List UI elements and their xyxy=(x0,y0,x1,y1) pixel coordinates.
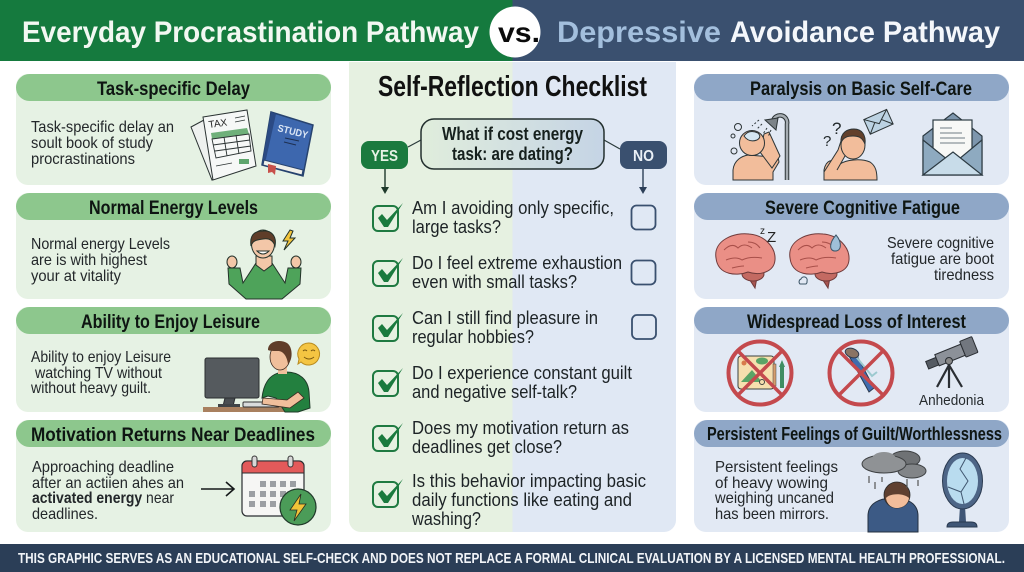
panel: severe cognitive fatigue: Severe cognitive xyxy=(887,235,994,252)
panel: persistent feelings of guilt/worthlessness: weighing uncaned xyxy=(714,490,834,507)
icon: study book xyxy=(262,112,313,176)
title: everyday procrastination pathway: Everyday Procrastination Pathway xyxy=(22,16,479,49)
checklist item 5: deadlines get close? xyxy=(412,436,562,457)
checklist item 2: Do I feel extreme exhaustion xyxy=(412,252,622,273)
panel: severe cognitive fatigue: Severe Cognitive Fatigue xyxy=(765,197,960,219)
panel: normal energy levels xyxy=(16,193,331,299)
panel: self-reflection checklist xyxy=(349,62,676,532)
panel: ability to enjoy leisure: without heavy guilt. xyxy=(30,380,151,397)
panel: ability to enjoy leisure xyxy=(16,307,331,412)
no label and arrow xyxy=(620,141,667,194)
header banner xyxy=(0,0,1024,61)
panel: normal energy levels: your at vitality xyxy=(31,268,121,285)
checklist item 6 xyxy=(373,470,646,529)
panel: motivation returns near deadlines: activated energy near xyxy=(32,490,175,507)
panel: motivation returns near deadlines xyxy=(16,420,331,532)
checklist item 3: Can I still find pleasure in xyxy=(412,307,598,328)
checklist item 4: and negative self-talk? xyxy=(412,381,577,402)
icon: confused person: ? xyxy=(832,119,841,138)
panel: severe cognitive fatigue xyxy=(694,193,1009,299)
panel: persistent feelings of guilt/worthlessness: Persistent feelings xyxy=(715,459,838,476)
yes label and arrow xyxy=(361,141,408,194)
checklist item 3: regular hobbies? xyxy=(412,326,534,347)
panel: normal energy levels: are is with highest xyxy=(31,252,148,269)
panel: motivation returns near deadlines: after an actiien ahes an xyxy=(32,475,184,492)
panel: persistent feelings of guilt/worthlessness xyxy=(694,420,1009,532)
panel: severe cognitive fatigue: tiredness xyxy=(934,267,994,284)
icon: telescope with anhedonia label xyxy=(919,337,985,409)
title: depressive avoidance pathway: Depressive xyxy=(557,16,721,49)
checklist item 6: washing? xyxy=(411,508,481,529)
footer disclaimer xyxy=(0,544,1024,572)
icon: confused person xyxy=(823,109,893,180)
panel: normal energy levels: Normal Energy Levels xyxy=(89,197,258,219)
panel: paralysis on basic self-care xyxy=(694,74,1009,185)
decision question: What if cost energy xyxy=(442,124,583,144)
arrow: to calendar xyxy=(201,482,234,496)
icon: smile bubble xyxy=(298,343,320,365)
icon: sleepy brain xyxy=(716,226,776,288)
title: depressive avoidance pathway: Avoidance Pathway xyxy=(730,16,1000,49)
icon: energetic person xyxy=(227,230,301,299)
panel: ability to enjoy leisure: Ability to enjoy Leisure xyxy=(31,349,171,366)
panel: motivation returns near deadlines: Motivation Returns Near Deadlines xyxy=(31,424,315,446)
icon: no hobby tool xyxy=(830,342,892,404)
checklist heading: Self-Reflection Checklist xyxy=(378,71,647,103)
yes label and arrow: YES xyxy=(371,148,398,165)
no label and arrow: NO xyxy=(633,148,654,165)
checklist item 5 xyxy=(373,417,629,457)
title: depressive avoidance pathway xyxy=(557,16,1000,49)
icon: shower xyxy=(731,115,787,180)
panel: ability to enjoy leisure: watching TV without xyxy=(34,365,162,382)
vs badge: vs. xyxy=(498,17,540,48)
checklist item 4: Do I experience constant guilt xyxy=(412,362,632,383)
checklist item 6: Is this behavior impacting basic xyxy=(412,470,646,491)
vs badge xyxy=(490,6,540,58)
panel: task-specific delay: Task-specific delay an xyxy=(31,119,174,136)
panel: persistent feelings of guilt/worthlessness: of heavy wowing xyxy=(715,475,828,492)
icon: sleepy brain: Z xyxy=(767,229,776,246)
checklist item 1: Am I avoiding only specific, xyxy=(412,197,614,218)
decision question: task: are dating? xyxy=(452,144,573,164)
decision question xyxy=(408,119,620,169)
icon: cracked mirror xyxy=(942,453,982,527)
icon: sleepy brain: z xyxy=(760,226,765,237)
caption: anhedonia: Anhedonia xyxy=(919,392,985,409)
icon: tax forms: TAX xyxy=(208,117,228,131)
panel: task-specific delay: soult book of study xyxy=(31,135,153,152)
checklist item 2 xyxy=(373,252,656,292)
checklist item 1: large tasks? xyxy=(412,216,501,237)
checklist item 1 xyxy=(373,197,656,237)
checklist item 3 xyxy=(373,307,656,347)
checklist item 6: daily functions like eating and xyxy=(412,489,632,510)
panel: ability to enjoy leisure: Ability to Enjoy Leisure xyxy=(81,311,260,333)
panel: motivation returns near deadlines: Approaching deadline xyxy=(32,459,174,476)
panel: persistent feelings of guilt/worthlessness: has been mirrors. xyxy=(715,506,829,523)
icon: study book: STUDY xyxy=(276,123,309,141)
panel: task-specific delay: Task-specific Delay xyxy=(97,78,250,100)
checklist item 4 xyxy=(373,362,632,402)
panel: normal energy levels: Normal energy Levels xyxy=(31,236,170,253)
panel: motivation returns near deadlines: deadlines. xyxy=(32,506,98,523)
panel: task-specific delay xyxy=(16,74,331,185)
icon: no painting xyxy=(728,342,792,404)
panel: task-specific delay: procrastinations xyxy=(31,151,135,168)
icon: confused person: ? xyxy=(823,133,831,150)
icon: person under rain cloud xyxy=(862,451,926,532)
icon: tax forms xyxy=(191,110,256,180)
icon: person watching screen xyxy=(203,341,320,412)
checklist item 2: even with small tasks? xyxy=(412,271,577,292)
icon: open envelope xyxy=(923,113,982,175)
icon: tired brain xyxy=(790,234,849,288)
panel: paralysis on basic self-care: Paralysis on Basic Self-Care xyxy=(750,78,972,100)
checklist item 5: Does my motivation return as xyxy=(412,417,629,438)
icon: calendar with energy xyxy=(242,456,316,525)
panel: widespread loss of interest: Widespread Loss of Interest xyxy=(747,311,966,333)
panel: widespread loss of interest xyxy=(694,307,1009,412)
panel: severe cognitive fatigue: fatigue are boot xyxy=(891,251,995,268)
